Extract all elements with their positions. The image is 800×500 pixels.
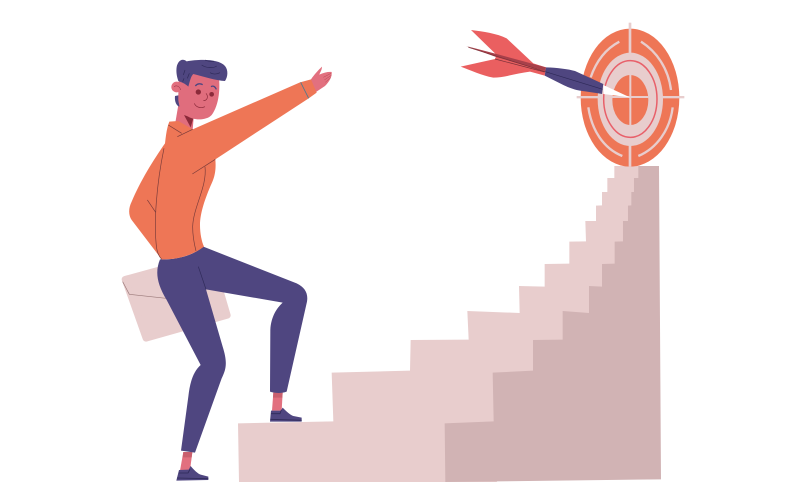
dartboard target bbox=[577, 23, 684, 167]
dart shaft bbox=[466, 46, 546, 71]
bullseye bbox=[612, 75, 648, 125]
stairs: dark side face bbox=[445, 166, 661, 482]
hand bbox=[307, 67, 332, 97]
nose and mouth bbox=[194, 93, 207, 108]
hair strands bbox=[183, 60, 220, 82]
ear bbox=[171, 82, 182, 92]
dart flights bbox=[461, 30, 546, 78]
bullseye crosshair bbox=[612, 75, 648, 125]
box carried behind the person bbox=[123, 256, 227, 338]
back sock cuff bbox=[273, 393, 283, 398]
finger lines bbox=[323, 73, 331, 82]
sleeve cuff line bbox=[301, 82, 309, 98]
trousers bbox=[157, 247, 307, 453]
eyes bbox=[196, 89, 214, 97]
central light ring bbox=[598, 53, 663, 146]
board face bbox=[581, 29, 679, 167]
trouser crease bbox=[198, 267, 206, 289]
staircase bbox=[238, 166, 661, 482]
crosshair bbox=[577, 23, 684, 167]
front shoe bbox=[176, 466, 208, 481]
back sock bbox=[272, 393, 283, 411]
box flap line bbox=[123, 282, 166, 298]
dart bbox=[461, 30, 630, 97]
stairs: light front face bbox=[238, 166, 639, 482]
person legs bbox=[157, 247, 307, 481]
back shoe sole bbox=[270, 410, 302, 420]
hair bbox=[176, 60, 227, 87]
front sock bbox=[180, 452, 192, 471]
front sock cuff bbox=[183, 452, 192, 457]
sweater seam lines bbox=[147, 125, 215, 259]
barrel line bbox=[545, 72, 603, 89]
dart barrel bbox=[545, 67, 603, 94]
red inner ring bbox=[604, 61, 657, 137]
face bbox=[178, 72, 219, 119]
dart tip bbox=[603, 85, 630, 97]
neck shadow bbox=[184, 115, 193, 127]
sweater bbox=[129, 79, 317, 259]
box body bbox=[125, 256, 227, 338]
hair behind ear bbox=[175, 95, 180, 107]
neck bbox=[175, 105, 194, 130]
ear detail bbox=[174, 86, 181, 90]
person upper body bbox=[129, 60, 332, 259]
outer ring arcs bbox=[588, 42, 673, 156]
shaft lines bbox=[468, 47, 545, 72]
front shoe sole bbox=[177, 469, 208, 479]
back shoe bbox=[270, 408, 302, 422]
eyebrows bbox=[195, 84, 216, 89]
